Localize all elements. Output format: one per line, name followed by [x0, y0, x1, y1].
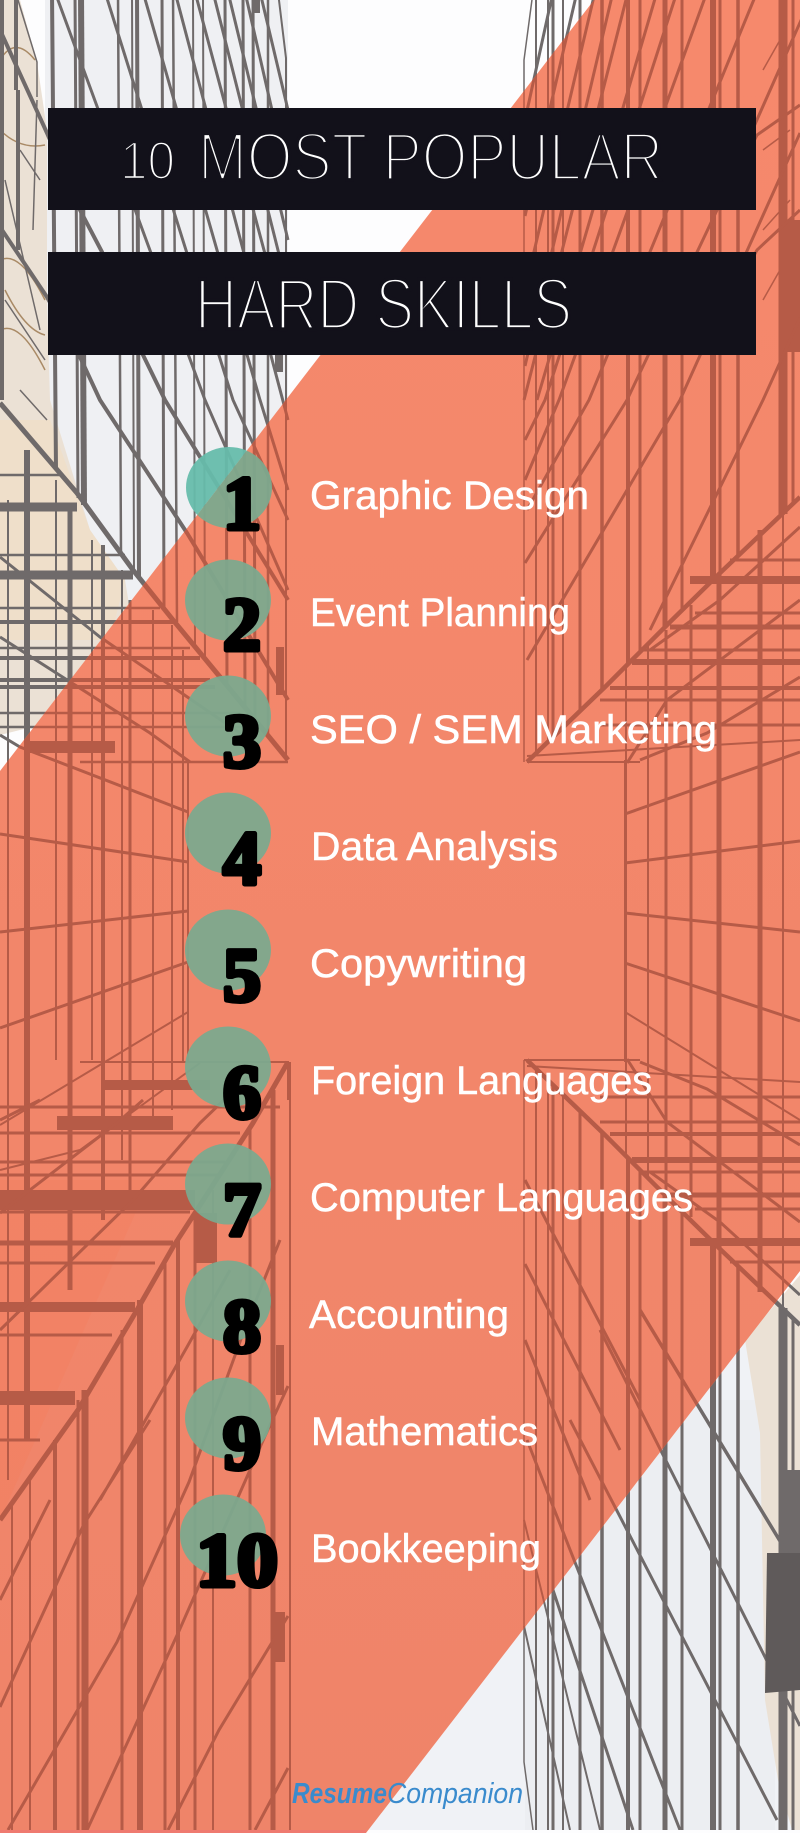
rank 1 marker [186, 447, 272, 532]
rank 3 marker: 3 [223, 700, 261, 784]
brand logo [292, 1778, 523, 1810]
rank 10 marker [180, 1494, 278, 1603]
skill 4 label: Data Analysis [311, 825, 558, 869]
title banner: hard skills: HARD SKILLS [195, 265, 572, 345]
skill 6 label: Foreign Languages [311, 1059, 652, 1103]
rank 3 marker [185, 676, 271, 784]
skill 8 label: Accounting [309, 1293, 509, 1337]
skill 9 label: Mathematics [311, 1410, 538, 1454]
rank 9 marker [185, 1378, 271, 1486]
skill 5 label: Copywriting [310, 942, 527, 986]
rank 7 marker [185, 1144, 271, 1252]
rank 2 marker [185, 560, 271, 667]
rank 1 marker: 1 [223, 462, 261, 546]
rank 4 marker [185, 792, 271, 901]
rank 6 marker: 6 [223, 1051, 261, 1135]
title banner: 10 most popular: MOST POPULAR [198, 119, 663, 195]
skills list [180, 447, 717, 1603]
skill 7 label: Computer Languages [310, 1176, 693, 1220]
rank 5 marker [185, 910, 271, 1018]
rank 4 marker: 4 [223, 817, 261, 901]
title banner: 10 most popular [48, 108, 756, 210]
rank 9 marker: 9 [223, 1402, 261, 1486]
skill 3 label: SEO / SEM Marketing [310, 708, 717, 752]
skill 2 label: Event Planning [310, 591, 570, 635]
title banner: 10 most popular: 10 [120, 131, 175, 191]
rank 8 marker [185, 1260, 271, 1369]
title banner: hard skills [48, 252, 756, 355]
rank 5 marker: 5 [223, 934, 261, 1018]
rank 8 marker: 8 [223, 1285, 261, 1369]
rank 10 marker: 10 [196, 1519, 278, 1603]
skill 1 label: Graphic Design [310, 474, 589, 518]
rank 2 marker: 2 [223, 583, 261, 667]
brand logo: Resume [292, 1778, 387, 1810]
skill 10 label: Bookkeeping [311, 1527, 541, 1571]
rank 6 marker [185, 1026, 271, 1135]
brand logo: Companion [387, 1778, 523, 1810]
rank 7 marker: 7 [223, 1168, 261, 1252]
